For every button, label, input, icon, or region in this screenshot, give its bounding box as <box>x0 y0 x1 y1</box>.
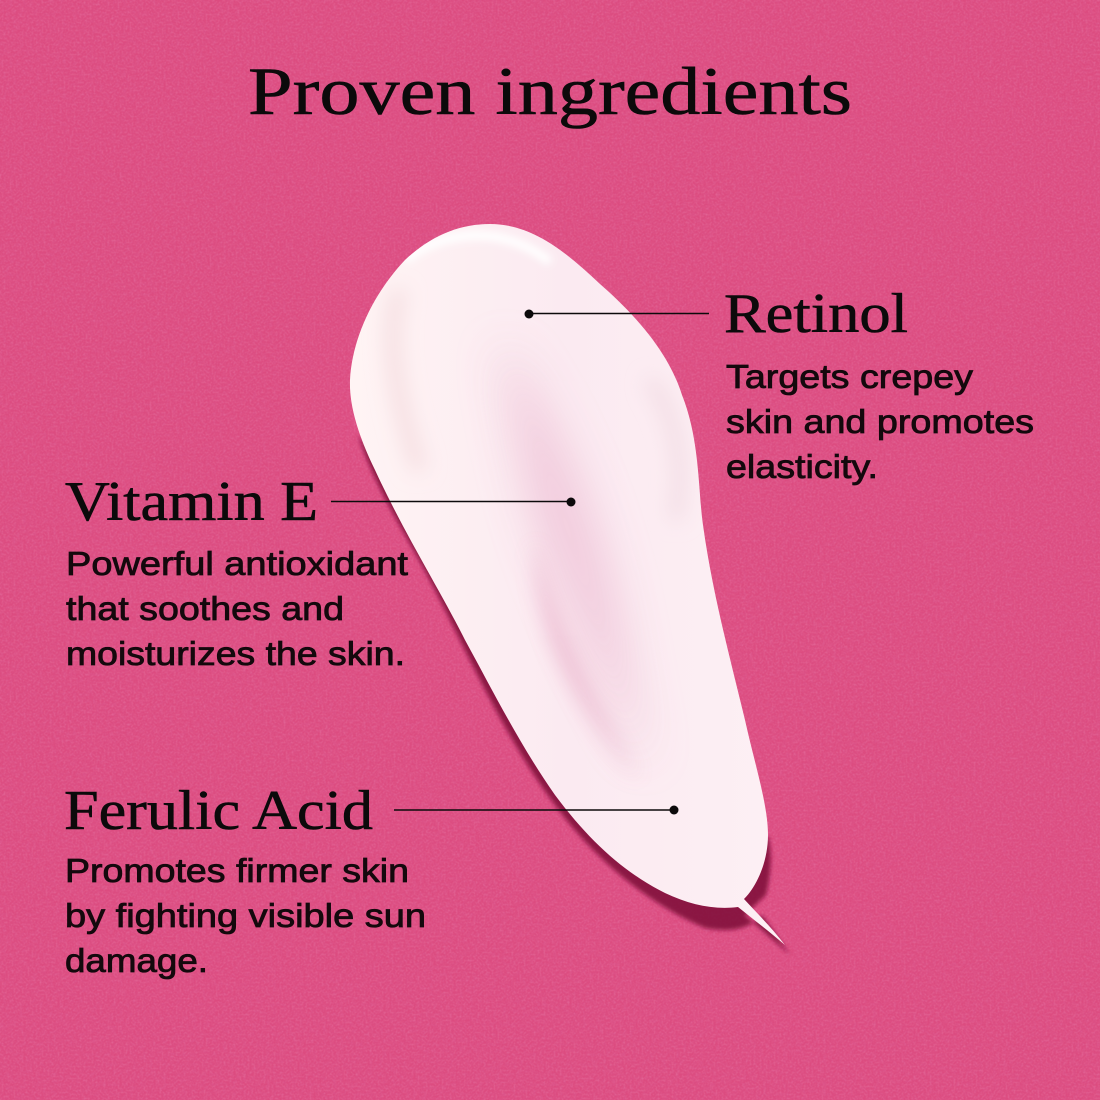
heading: vitamin e: Vitamin E <box>65 471 318 533</box>
callout: vitamin e <box>65 471 576 672</box>
callout: retinol <box>524 283 1034 485</box>
leader line: vitamin e <box>331 498 576 506</box>
text: vitamin e: that soothes and <box>66 590 344 627</box>
heading: retinol: Retinol <box>724 283 908 345</box>
text: vitamin e: moisturizes the skin. <box>66 635 405 672</box>
leader line: retinol <box>524 310 709 318</box>
heading: ferulic acid: Ferulic Acid <box>64 780 373 842</box>
callout: ferulic acid <box>64 780 678 979</box>
text: ferulic acid: by fighting visible sun <box>65 897 426 934</box>
text: retinol: skin and promotes <box>726 403 1034 440</box>
text: retinol: Targets crepey <box>726 358 974 395</box>
cream shadow <box>358 435 790 955</box>
leader line: ferulic acid <box>394 806 678 814</box>
text: vitamin e: Powerful antioxidant <box>66 545 408 582</box>
cream body <box>350 224 785 945</box>
text: retinol: elasticity. <box>726 448 878 485</box>
text: ferulic acid: damage. <box>65 942 208 979</box>
title: Proven ingredients <box>248 53 852 129</box>
text: ferulic acid: Promotes firmer skin <box>65 852 409 889</box>
cream shading <box>393 235 679 780</box>
cream swatch <box>350 224 790 955</box>
